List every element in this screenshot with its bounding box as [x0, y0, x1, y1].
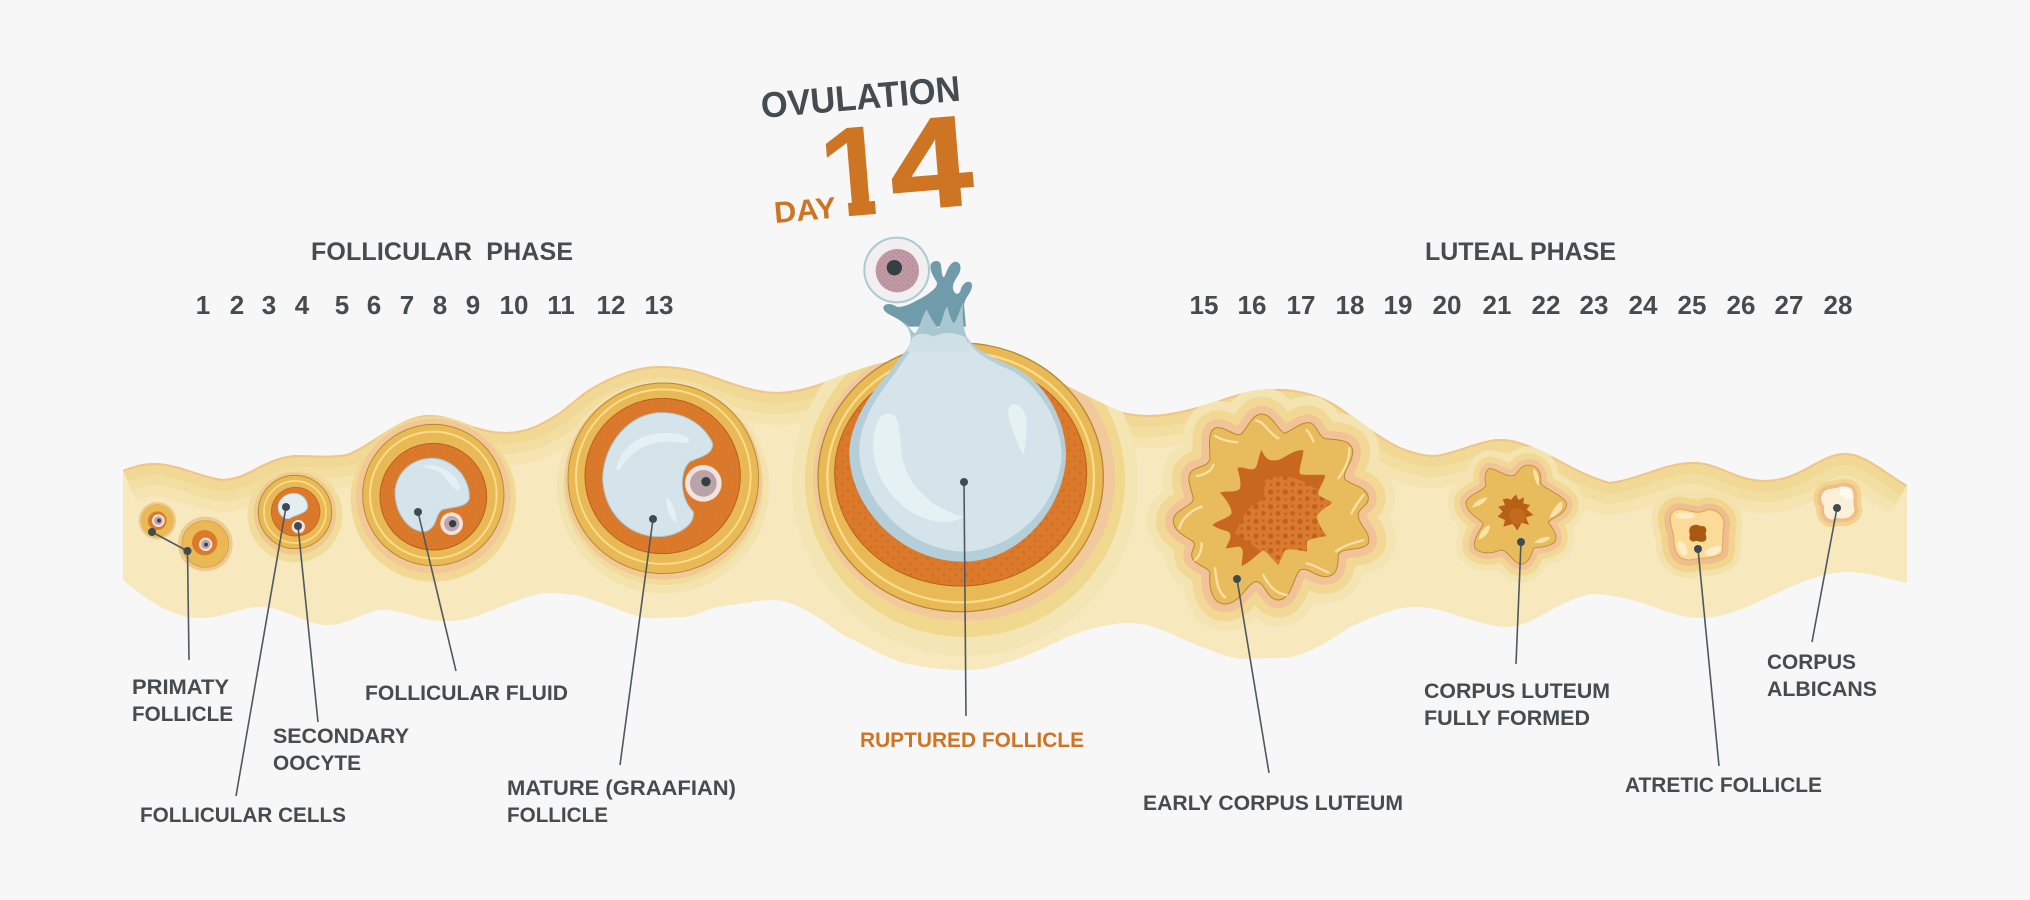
label: mature graafian follicle: MATURE (GRAAFIAN) — [507, 777, 736, 800]
follicle wall and fluid — [818, 337, 1103, 612]
label: ruptured follicle — [860, 478, 1084, 752]
ovary tissue band — [123, 343, 1907, 670]
luteal body — [1466, 465, 1567, 564]
day numbers 15 to 28: 16 — [1238, 290, 1266, 320]
label: atretic follicle: ATRETIC FOLLICLE — [1625, 774, 1822, 797]
day numbers 15 to 28: 26 — [1727, 290, 1755, 320]
ruptured follicle — [792, 238, 1138, 656]
day numbers 1 to 13: 4 — [295, 290, 310, 320]
halo layers — [1466, 465, 1567, 564]
day numbers 15 to 28: 22 — [1532, 290, 1560, 320]
day numbers 1 to 13: 5 — [335, 290, 349, 320]
label: atretic follicle — [1625, 545, 1822, 797]
day numbers 15 to 28: 27 — [1775, 290, 1803, 320]
day numbers 1 to 13: 1 — [196, 290, 210, 320]
day numbers 15 to 28: 15 — [1190, 290, 1218, 320]
title: ovulation day 14: OVULATION — [759, 68, 962, 126]
secondary follicle — [248, 468, 342, 562]
label: secondary oocyte: SECONDARY — [273, 725, 409, 748]
label: corpus luteum fully formed: FULLY FORMED — [1424, 707, 1590, 730]
tissue halo rings — [792, 310, 1138, 656]
label: early corpus luteum — [1143, 575, 1403, 815]
label: follicular cells: FOLLICULAR CELLS — [140, 804, 346, 827]
day numbers 1 to 13: 12 — [597, 290, 625, 320]
label: secondary oocyte — [273, 522, 409, 775]
day numbers 1 to 13: 2 — [230, 290, 244, 320]
label: follicular fluid — [365, 508, 568, 705]
released oocyte — [864, 238, 929, 302]
day numbers 15 to 28 — [1190, 290, 1852, 320]
day numbers 1 to 13: 10 — [500, 290, 528, 320]
label: follicular cells — [140, 503, 346, 827]
title: ovulation day 14: 1 — [814, 98, 896, 246]
label: follicular fluid: FOLLICULAR FLUID — [365, 682, 568, 705]
day numbers 1 to 13: 7 — [400, 290, 414, 320]
corpus luteum fully formed — [1466, 465, 1567, 564]
heading: luteal phase: LUTEAL PHASE — [1425, 238, 1616, 266]
day numbers 15 to 28: 23 — [1580, 290, 1608, 320]
label: primary follicle: FOLLICLE — [132, 703, 233, 726]
day numbers 15 to 28: 18 — [1336, 290, 1364, 320]
label: corpus luteum fully formed — [1424, 538, 1610, 730]
label: ruptured follicle: RUPTURED FOLLICLE — [860, 729, 1084, 752]
label: mature graafian follicle — [507, 515, 736, 827]
day numbers 15 to 28: 17 — [1287, 290, 1315, 320]
label: corpus albicans — [1767, 504, 1877, 701]
follicle with fluid — [351, 416, 516, 582]
corpus albicans — [1821, 486, 1855, 520]
day numbers 15 to 28: 24 — [1629, 290, 1658, 320]
day numbers 15 to 28: 25 — [1678, 290, 1706, 320]
day numbers 15 to 28: 21 — [1483, 290, 1511, 320]
rupture splash — [883, 261, 972, 352]
day numbers 1 to 13: 13 — [645, 290, 673, 320]
title: ovulation day 14: 4 — [884, 89, 977, 238]
day numbers 1 to 13 — [196, 290, 673, 320]
label: mature graafian follicle: FOLLICLE — [507, 804, 608, 827]
label: secondary oocyte: OOCYTE — [273, 752, 361, 775]
title: ovulation day 14 — [762, 76, 974, 223]
atretic follicle — [1670, 509, 1724, 560]
title: ovulation day 14: DAY — [773, 192, 837, 230]
label: primary follicle: PRIMATY — [132, 676, 229, 699]
label: early corpus luteum: EARLY CORPUS LUTEUM — [1143, 792, 1403, 815]
label: corpus luteum fully formed: CORPUS LUTEUM — [1424, 680, 1610, 703]
label: corpus albicans: CORPUS — [1767, 651, 1856, 674]
label: primary follicle — [132, 528, 233, 726]
primary follicles — [139, 502, 233, 571]
day numbers 1 to 13: 3 — [262, 290, 276, 320]
day numbers 1 to 13: 6 — [367, 290, 381, 320]
day numbers 15 to 28: 20 — [1433, 290, 1461, 320]
halo layers — [1173, 414, 1369, 604]
early corpus luteum — [1173, 414, 1369, 604]
label: corpus albicans: ALBICANS — [1767, 678, 1877, 701]
heading: follicular phase: FOLLICULAR PHASE — [311, 238, 573, 266]
day numbers 15 to 28: 28 — [1824, 290, 1852, 320]
day numbers 15 to 28: 19 — [1384, 290, 1412, 320]
luteal body — [1173, 414, 1369, 604]
day numbers 1 to 13: 9 — [466, 290, 480, 320]
day numbers 1 to 13: 11 — [547, 290, 575, 320]
day numbers 1 to 13: 8 — [433, 290, 447, 320]
mature graafian follicle — [557, 381, 769, 593]
